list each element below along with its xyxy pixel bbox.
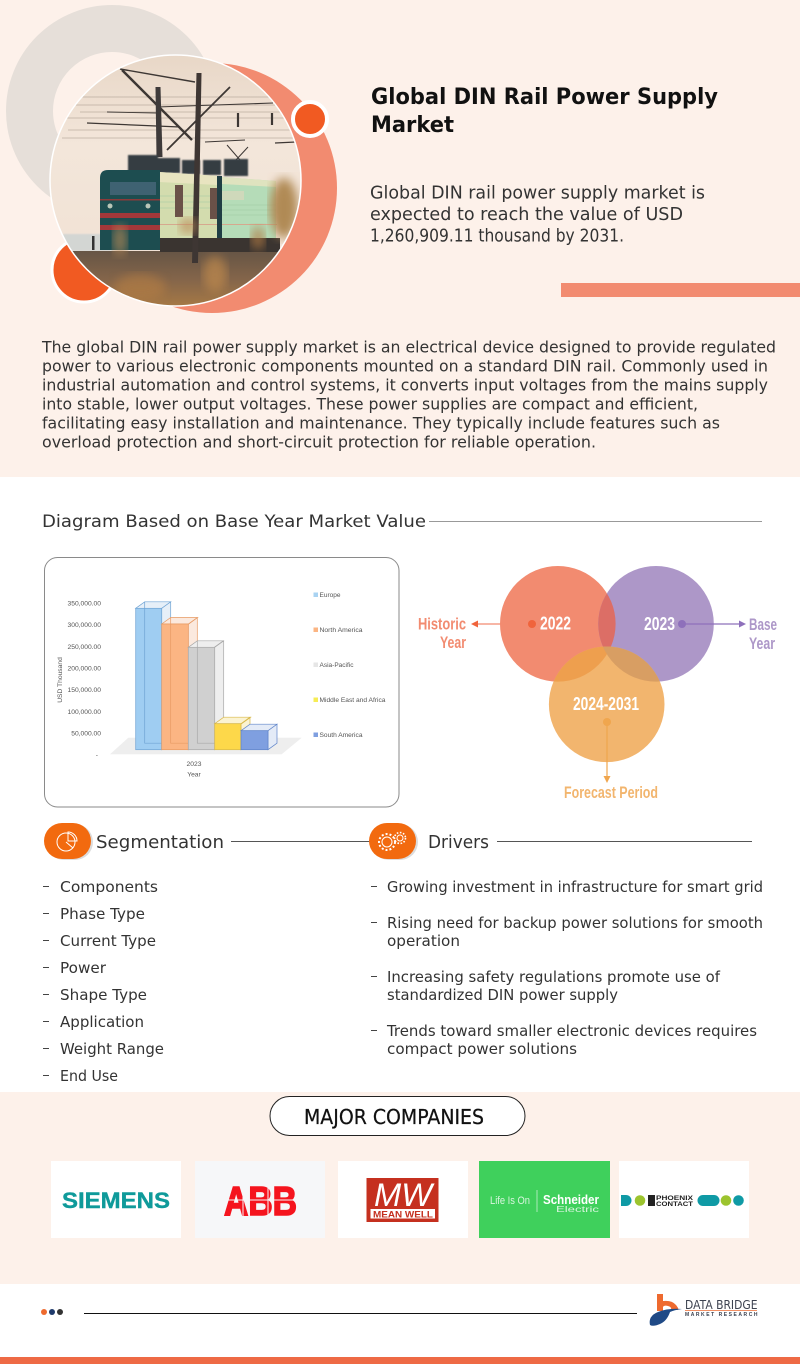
circle: historic year [500,566,616,682]
label: base year: Base [749,615,777,634]
y axis labels: - [96,752,98,759]
y axis labels [68,600,101,759]
drivers list: Growing investment in infrastructure for smart grid [387,878,763,896]
segmentation list: Phase Type [60,905,145,923]
arrow: base year [678,620,746,628]
segmentation list: Components [60,878,158,896]
arrow: forecast period [603,718,611,783]
bar: North America [162,618,198,750]
x axis labels: Year [187,772,202,778]
arrow: historic year [471,620,536,628]
major companies heading [270,1096,525,1136]
photo outline [50,55,301,306]
logo: ABB [195,1161,325,1238]
grey ring [30,28,194,194]
logo: Schneider Electric [479,1161,610,1238]
label: base year [749,615,777,653]
x axis labels: 2023 [187,761,202,768]
drivers list: standardized DIN power supply [387,986,618,1004]
logo: Phoenix Contact: PHOENIX [656,1196,693,1202]
chart legend: North America [320,627,363,634]
venn timeline diagram [418,566,777,802]
market description paragraph: power to various electronic components mounted on a standard DIN rail. Commonly used in [42,356,768,376]
market value summary: Global DIN rail power supply market is [370,184,705,204]
icon: pie chart [44,823,93,860]
chart legend: Asia-Pacific [320,662,354,669]
drivers list: Trends toward smaller electronic devices requires [386,1022,757,1040]
drivers list: Rising need for backup power solutions for smooth [387,914,763,932]
market value summary: 1,260,909.11 thousand by 2031. [370,227,624,247]
logo: ABB: ABB [224,1178,297,1224]
bar: Middle East and Africa [215,717,251,750]
logo: Mean Well: MW [374,1177,435,1213]
segmentation list: Weight Range [60,1040,164,1058]
year labels: 2022 [540,614,571,634]
train photograph [50,55,302,308]
label: historic year: Historic [418,614,466,634]
roof equipment [128,155,248,176]
chart legend: Middle East and Africa [320,697,386,704]
segmentation list: End Use [60,1067,118,1085]
chart legend [314,592,386,739]
lower orange circle [52,238,116,302]
chart legend: South America [320,732,363,739]
bar: Europe [136,602,171,750]
market description paragraph: The global DIN rail power supply market is an electrical device designed to provide regulated [41,338,776,356]
title: Market [371,112,454,138]
logo: Siemens: SIEMENS [62,1188,170,1213]
logo: Data Bridge: MARKET RESEARCH [685,1312,758,1318]
logo: Mean Well: MEAN WELL [373,1210,433,1220]
logo: Schneider Electric: Schneider [543,1192,599,1207]
circle: forecast period [549,646,664,762]
logo: Siemens [51,1161,181,1238]
title: Global DIN Rail Power Supply [371,84,718,110]
segmentation list: Application [60,1013,144,1031]
y axis title: USD Thousand [57,657,64,703]
bar: South America [241,724,277,750]
label: forecast period: Forecast Period [564,783,658,802]
year labels: 2024-2031 [573,694,639,714]
locomotive body [159,172,218,240]
logo: Data Bridge: DATA BRIDGE [685,1298,758,1312]
segmentation list [43,878,164,1085]
logo: Data Bridge [650,1294,758,1326]
y axis labels: 350,000.00 [68,600,101,607]
bar chart panel [44,558,399,807]
market description paragraph: industrial automation and control systems, it converts input voltages from the mains supply [42,376,768,394]
label: historic year [418,614,466,652]
drivers list: Increasing safety regulations promote use of [387,968,721,986]
y axis labels: 150,000.00 [68,687,101,694]
drivers header: Drivers [428,832,489,853]
icon: gears [369,823,418,860]
market description paragraph: into stable, lower output voltages. These power supplies are compact and efficient, [42,394,698,414]
small orange dot [293,102,327,136]
drivers list [371,878,763,1058]
segmentation list: Shape Type [60,986,147,1004]
circle: base year [598,566,714,682]
year labels [540,614,675,714]
logo: Schneider Electric: Life Is On [490,1195,530,1207]
chart floor [110,738,302,754]
y axis labels: 250,000.00 [68,644,101,651]
segmentation header: Segmentation [96,832,224,853]
drivers list: operation [387,932,460,950]
y axis labels: 50,000.00 [71,730,101,737]
companies peach background [0,1092,800,1284]
year labels: 2023 [644,614,675,634]
drivers header [369,823,752,860]
segmentation header [44,823,370,860]
title [371,84,718,138]
logo: Phoenix Contact: CONTACT [656,1202,693,1208]
salmon crescent [87,63,337,313]
bottom orange bar [0,1357,800,1364]
drivers list: compact power solutions [387,1040,577,1058]
segmentation list: Current Type [60,932,156,950]
label: base year: Year [749,634,775,653]
market value summary [370,184,705,247]
y axis labels: 300,000.00 [68,622,101,629]
label: historic year: Year [440,633,466,652]
logo: Phoenix Contact [619,1161,749,1238]
footer line [84,1312,637,1314]
segmentation list: Power [60,959,107,977]
market description paragraph: facilitating easy installation and maintenance. They typically include features such as [42,414,720,432]
footer dots [41,1309,63,1315]
salmon accent bar [561,283,800,297]
y axis labels: 100,000.00 [68,709,101,716]
market description paragraph [41,338,776,452]
major companies heading: MAJOR COMPANIES [304,1105,484,1129]
y axis labels: 200,000.00 [68,666,101,672]
top peach background [0,0,800,477]
market description paragraph: overload protection and short-circuit protection for reliable operation. [42,432,596,452]
logo: Mean Well [338,1161,468,1238]
x axis labels [187,761,202,778]
bar: Asia-Pacific [188,641,224,750]
market value summary: expected to reach the value of USD [370,205,683,225]
logo: Schneider Electric: Electric [556,1205,599,1214]
diagram heading: Diagram Based on Base Year Market Value [42,512,426,532]
hero image cluster [30,28,337,313]
overlap: historic and base [598,594,616,646]
overlap: base and forecast [603,646,660,682]
chart legend: Europe [320,592,341,599]
overlap: historic and forecast [554,646,607,682]
